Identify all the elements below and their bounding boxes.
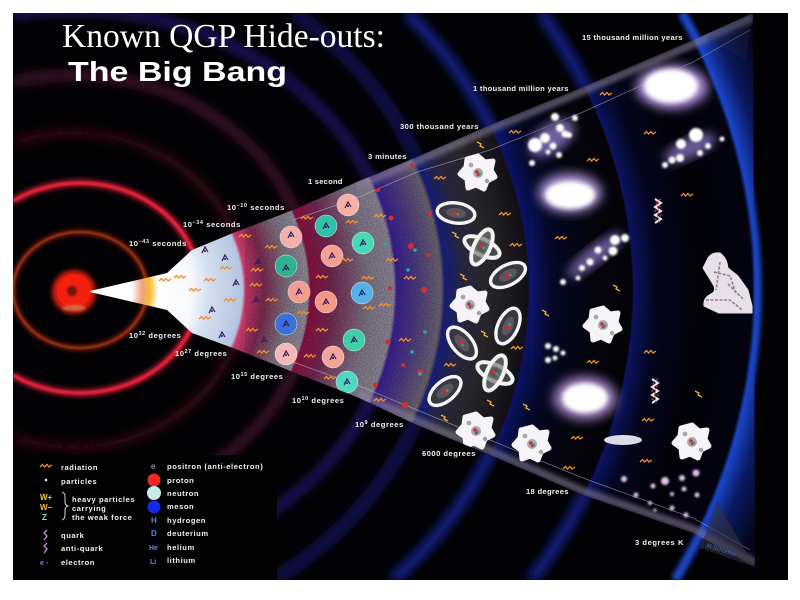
corner light-cone facets xyxy=(700,13,755,567)
primordial fireball core xyxy=(52,270,96,314)
timeline labels: time: 10 xyxy=(129,239,139,248)
timeline labels: temperature: 10 xyxy=(355,420,365,429)
legend labels: carrying xyxy=(72,504,106,513)
legend labels: quark xyxy=(61,531,85,540)
atoms zone xyxy=(424,156,529,447)
wedge edge haze xyxy=(357,17,755,563)
galaxy formation blobs xyxy=(523,65,724,518)
timeline labels: time: −10 xyxy=(237,203,248,209)
timeline labels: temperature: degrees xyxy=(146,331,181,340)
hadrons: protons, neutrons, mesons xyxy=(275,194,374,393)
timeline labels: temperature: 15 xyxy=(241,372,248,378)
timeline labels: time: seconds xyxy=(248,203,285,212)
legend labels: the weak force xyxy=(72,513,132,522)
legend icons: right column: e xyxy=(151,462,156,471)
radiation squiggles xyxy=(159,92,702,469)
timeline labels: temperature: degrees xyxy=(248,372,283,381)
timeline labels: temperature: 32 xyxy=(139,331,146,337)
timeline labels: temperature: 10 xyxy=(129,331,139,340)
timeline labels: time: 1 second xyxy=(308,177,343,186)
legend icons: left column: e - xyxy=(40,560,49,567)
artist signature: M.Schumm xyxy=(705,543,736,558)
legend labels: helium xyxy=(167,543,195,552)
timeline labels: time xyxy=(129,33,683,248)
timeline labels: time: 15 thousand million years xyxy=(582,33,683,42)
timeline labels: time: seconds xyxy=(150,239,187,248)
legend labels: positron (anti-electron) xyxy=(167,462,263,471)
timeline labels: temperature xyxy=(129,331,684,547)
legend labels: particles xyxy=(61,477,97,486)
legend labels xyxy=(61,462,263,567)
legend icons: left column: W+ xyxy=(40,493,53,502)
timeline labels: temperature: degrees xyxy=(309,396,344,405)
legend icons: left column: Z xyxy=(42,513,47,522)
legend labels: meson xyxy=(167,502,194,511)
timeline labels: temperature: 10 xyxy=(302,396,309,402)
quarks inside hadrons xyxy=(202,202,366,385)
timeline labels: temperature: degrees xyxy=(368,420,404,429)
timeline labels: time: 10 xyxy=(183,220,193,229)
timeline labels: time: 3 minutes xyxy=(368,152,407,161)
timeline labels: temperature: 18 degrees xyxy=(526,487,569,496)
timeline labels: temperature: 10 xyxy=(175,349,185,358)
legend labels: lithium xyxy=(167,556,196,565)
legend icons: left column xyxy=(40,464,68,567)
title: Known QGP Hide-outs: xyxy=(62,18,385,55)
legend labels: hydrogen xyxy=(167,516,206,525)
timeline labels: time: 1 thousand million years xyxy=(473,84,569,93)
timeline labels: temperature: 9 xyxy=(365,420,368,426)
legend icons: right column xyxy=(147,462,161,566)
timeline labels: temperature: 6000 degrees xyxy=(422,449,476,458)
legend labels: heavy particles xyxy=(72,495,135,504)
timeline labels: time: −34 xyxy=(193,220,204,226)
legend icons: left column: W− xyxy=(40,503,53,512)
late atoms xyxy=(514,308,709,460)
flat disc galaxy xyxy=(604,435,642,445)
nuclei and small particles xyxy=(372,163,432,408)
legend icons: right column: H xyxy=(151,516,157,525)
legend labels: electron xyxy=(61,558,95,567)
timeline labels: temperature: 27 xyxy=(185,349,192,355)
timeline labels: time: 10 xyxy=(227,203,237,212)
timeline labels: time: 300 thousand years xyxy=(400,122,479,131)
legend icons: right column: He xyxy=(149,545,158,552)
timeline labels: temperature: 10 xyxy=(292,396,302,405)
timeline labels: time: seconds xyxy=(204,220,241,229)
subtitle: The Big Bang xyxy=(68,56,287,87)
legend labels: anti-quark xyxy=(61,544,103,553)
legend icons: right column: D xyxy=(151,529,157,538)
legend labels: neutron xyxy=(167,489,199,498)
legend labels: deuterium xyxy=(167,529,209,538)
timeline labels: temperature: 10 xyxy=(231,372,241,381)
timeline labels: time: −43 xyxy=(139,239,150,245)
legend labels: proton xyxy=(167,476,194,485)
DNA strands xyxy=(652,199,661,403)
legend labels: radiation xyxy=(61,463,98,472)
timeline labels: temperature: degrees xyxy=(192,349,227,358)
legend panel xyxy=(13,455,277,580)
timeline labels: temperature: 3 degrees K xyxy=(635,538,684,547)
legend icons: right column: Li xyxy=(150,559,156,566)
thinker statue xyxy=(703,253,752,313)
